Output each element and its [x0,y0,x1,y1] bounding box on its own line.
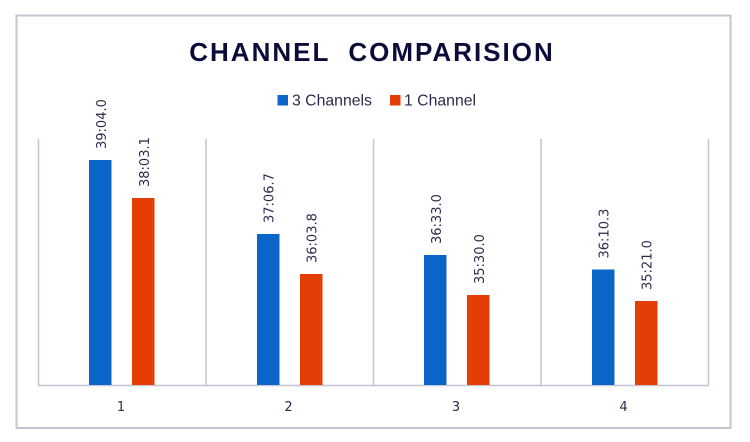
group 2 bars: 37:06.7 [262,173,278,223]
category labels [117,400,628,415]
group 3 bars [424,194,490,385]
group 4 bars: 36:10.3 [598,209,612,258]
group 4 bars: 35:21.0 [640,240,656,290]
group 3 bars: 36:33.0 [430,194,445,244]
group 4 bars [592,209,658,385]
group 3 bars: 35:30.0 [473,234,488,284]
gridlines and axis [38,139,709,386]
title: CHANNEL COMPARISION [189,37,555,67]
legend: 3 Channels [292,92,372,110]
category labels: 4 [619,400,628,415]
group 2 bars: 36:03.8 [306,213,320,263]
group 1 bars [89,99,154,385]
legend [278,92,476,110]
group 1 bars: 39:04.0 [95,99,110,149]
category labels: 3 [452,400,460,415]
group 1 bars: 38:03.1 [138,137,153,187]
group 2 bars [257,173,322,385]
category labels: 1 [117,400,125,415]
category labels: 2 [284,400,293,415]
legend: 1 Channel [404,92,476,110]
